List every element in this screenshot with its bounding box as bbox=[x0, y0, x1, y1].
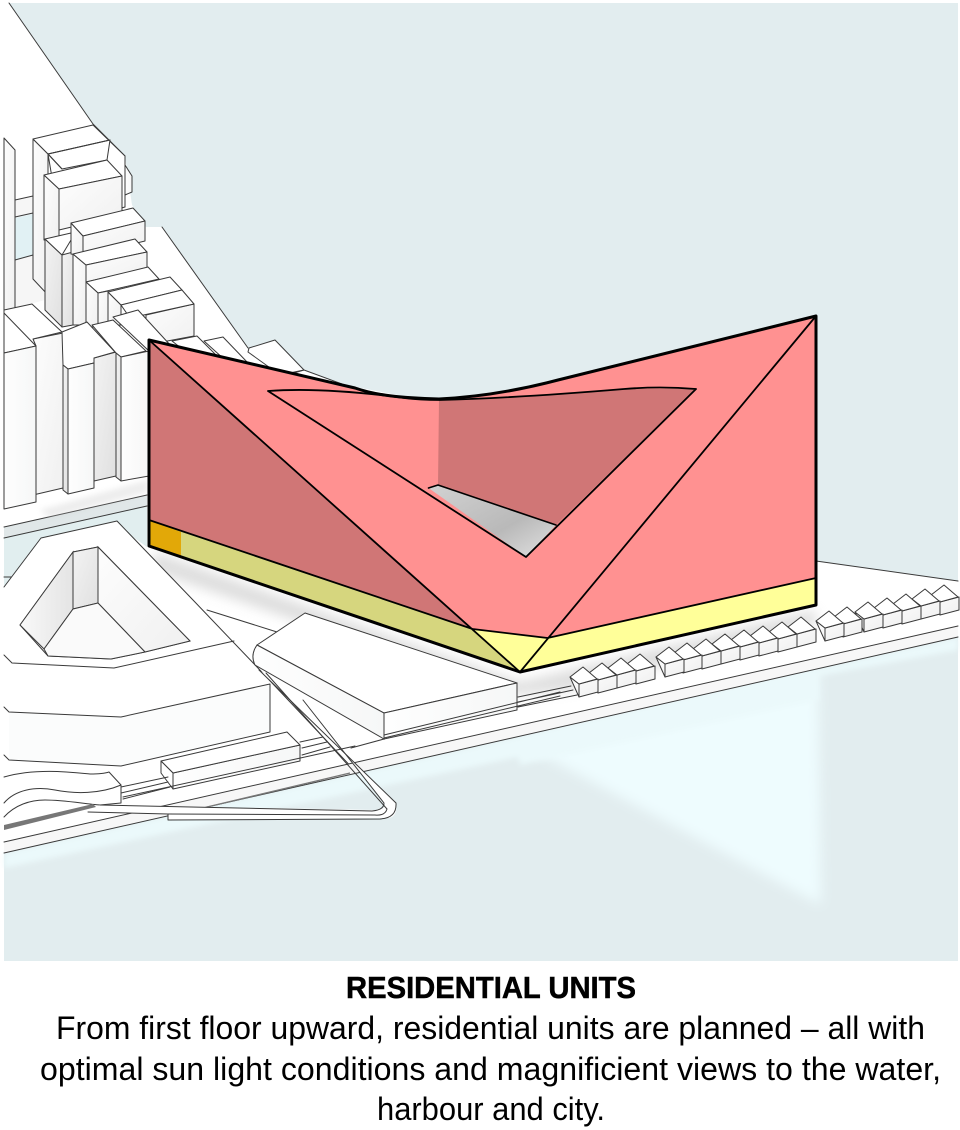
body text: From first floor upward, residential units are planned – all with bbox=[56, 1010, 925, 1046]
land mass bbox=[4, 3, 958, 853]
curved ramp bbox=[88, 670, 396, 820]
shoreline glow bbox=[4, 637, 958, 868]
shaded west facade bbox=[149, 340, 473, 629]
front city buildings bbox=[4, 304, 172, 509]
orange corner unit bbox=[149, 520, 181, 556]
shaded yellow ground floor bbox=[149, 520, 520, 672]
water reflection bbox=[518, 668, 821, 905]
pink residential facades bbox=[149, 316, 816, 638]
courtyard bbox=[20, 547, 190, 659]
main residential building bbox=[149, 316, 816, 672]
shoreline edges bbox=[4, 626, 958, 853]
rooftops behind main building bbox=[172, 336, 342, 384]
body text bbox=[40, 1010, 941, 1127]
land edge lines bbox=[9, 3, 958, 581]
small block and rail tracks bbox=[121, 686, 577, 799]
ground shadows bbox=[40, 480, 816, 695]
row houses bbox=[570, 585, 959, 697]
window: shaded inner facade bbox=[438, 389, 696, 525]
dark hatched road bbox=[4, 804, 96, 830]
body text: optimal sun light conditions and magnificient views to the water, bbox=[40, 1051, 941, 1087]
window: courtyard ground bbox=[428, 485, 556, 557]
terraced contour lines bbox=[4, 771, 121, 830]
left water gaps bbox=[4, 495, 147, 587]
body text: harbour and city. bbox=[377, 1091, 605, 1127]
yellow ground floor bbox=[473, 578, 816, 672]
caption bbox=[40, 970, 941, 1127]
rear city buildings bbox=[4, 125, 194, 345]
heading: RESIDENTIAL UNITS bbox=[346, 970, 636, 1005]
long low block with rounded end bbox=[253, 613, 517, 739]
island building with courtyard bbox=[4, 521, 357, 773]
building linework bbox=[149, 316, 816, 672]
